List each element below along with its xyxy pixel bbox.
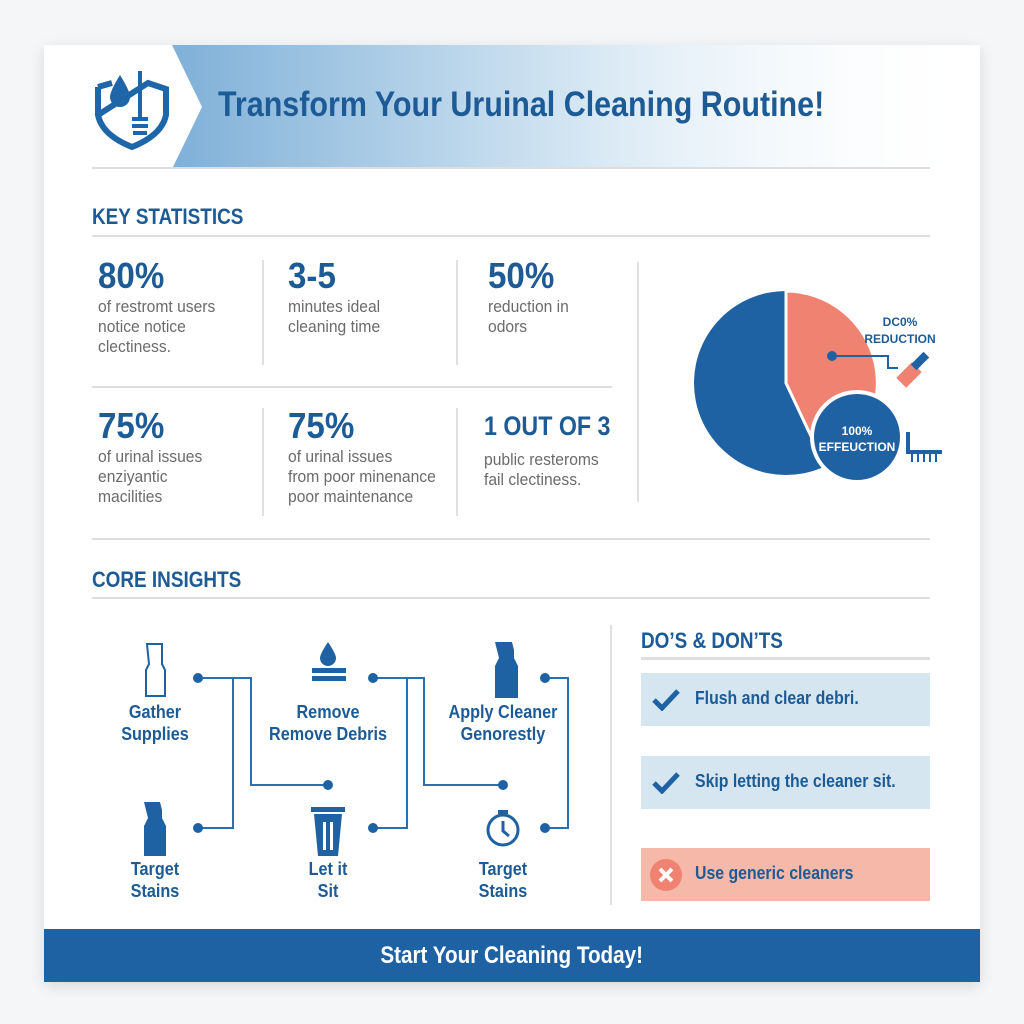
stat 3: odors	[488, 317, 527, 336]
stat 5: 75%	[288, 405, 354, 446]
pie chart	[694, 291, 942, 480]
title: Transform Your Uruinal Cleaning Routine!	[218, 85, 824, 124]
stat 6: fail clectiness.	[484, 470, 581, 489]
stat 6	[484, 411, 610, 489]
stat 1: notice notice	[98, 317, 186, 336]
stat 5: of urinal issues	[288, 447, 392, 466]
step labels	[121, 702, 189, 744]
stat 4: of urinal issues	[98, 447, 202, 466]
stats grid	[98, 255, 610, 506]
stat 5	[288, 405, 436, 506]
heading: core insights: CORE INSIGHTS	[92, 567, 241, 592]
stat 5: poor maintenance	[288, 487, 413, 506]
text: Target	[479, 859, 527, 879]
text: Remove	[296, 702, 360, 722]
stat 4: macilities	[98, 487, 162, 506]
heading: dos and donts: DO’S & DON’TS	[641, 628, 783, 653]
stat 1: clectiness.	[98, 337, 171, 356]
stat 4	[98, 405, 202, 506]
pie chart: DC0%	[883, 315, 918, 329]
pie chart: EFFEUCTION	[819, 440, 895, 454]
stat 1: of restromt users	[98, 297, 215, 316]
pie chart: 100%	[842, 424, 873, 438]
text: Let it	[309, 859, 347, 879]
stat 6: public resteroms	[484, 450, 599, 469]
stat 2: cleaning time	[288, 317, 380, 336]
stat 5: from poor minenance	[288, 467, 436, 486]
stat 1: 80%	[98, 255, 164, 296]
stat 2: minutes ideal	[288, 297, 380, 316]
text: Genorestly	[461, 724, 545, 744]
stat 2: 3-5	[288, 255, 336, 296]
icon: stopwatch	[488, 815, 518, 845]
heading: key statistics: KEY STATISTICS	[92, 204, 243, 229]
header banner	[172, 45, 804, 167]
stat 4: enziyantic	[98, 467, 168, 486]
icon: drop	[320, 642, 336, 666]
stat 1	[98, 255, 215, 356]
step labels: Supplies	[121, 724, 189, 744]
stat 4: 75%	[98, 405, 164, 446]
stat 3	[488, 255, 569, 336]
stat 3: reduction in	[488, 297, 569, 316]
icon: spray	[495, 642, 518, 698]
step labels: Gather	[129, 702, 181, 722]
footer CTA: Start Your Cleaning Today!	[381, 942, 643, 969]
dont	[641, 848, 930, 901]
do 1	[641, 673, 930, 726]
icon: shield logo	[94, 71, 169, 150]
dont: Use generic cleaners	[695, 863, 853, 883]
stat 2	[288, 255, 380, 336]
text: Remove Debris	[269, 724, 387, 744]
text: Stains	[479, 881, 527, 901]
do 1: Flush and clear debri.	[695, 688, 859, 708]
pie chart: REDUCTION	[864, 332, 936, 346]
icon: trash	[314, 814, 342, 856]
text: Stains	[131, 881, 179, 901]
text: Target	[131, 859, 179, 879]
stat 6: 1 OUT OF 3	[484, 411, 610, 441]
text: Apply Cleaner	[449, 702, 557, 722]
do 2: Skip letting the cleaner sit.	[695, 771, 896, 791]
do 2	[641, 756, 930, 809]
flow diagram	[144, 642, 569, 856]
footer CTA	[44, 929, 980, 982]
icon: bottle outline	[146, 644, 165, 696]
text: Sit	[318, 881, 338, 901]
stat 3: 50%	[488, 255, 554, 296]
